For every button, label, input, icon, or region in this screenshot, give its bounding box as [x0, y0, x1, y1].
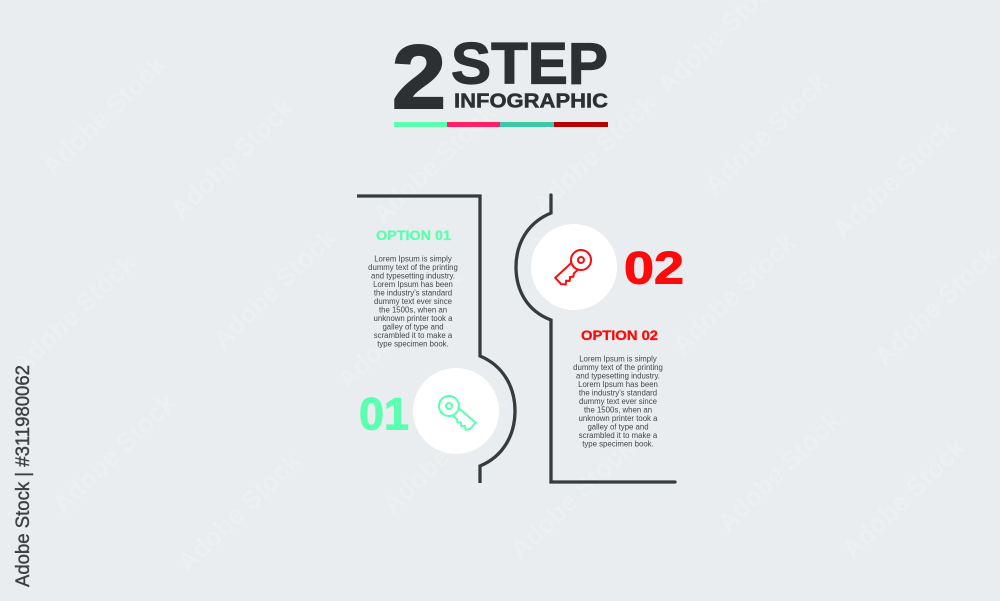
text: Adobe Stock	[46, 387, 182, 520]
text: Adobe Stock	[206, 222, 342, 355]
text block: option 01: and typesetting industry.	[371, 272, 455, 280]
text block: option 02: dummy text of the printing	[573, 363, 663, 372]
text block: option 01: the 1500s, when an	[379, 306, 447, 314]
outline: option 02 frame	[516, 195, 675, 482]
text block: option 01: unknown printer took a	[374, 314, 453, 323]
icon circle 02	[531, 224, 617, 310]
stock credit: Adobe Stock | #311980062	[12, 365, 34, 587]
icon circle 01	[413, 368, 499, 454]
text: Adobe Stock	[666, 227, 802, 360]
text block: option 02: Lorem Ipsum is simply	[579, 354, 657, 364]
title numeral 2: 2	[392, 28, 446, 128]
heading: option 02: OPTION 02	[581, 328, 658, 343]
number 01: 01	[359, 388, 409, 440]
text block: option 02: type specimen book.	[582, 440, 654, 448]
text block: option 01: scrambled it to make a	[374, 331, 453, 340]
text block: option 02: and typesetting industry.	[576, 372, 660, 380]
title word INFOGRAPHIC: INFOGRAPHIC	[454, 90, 608, 112]
text: Adobe Stock	[711, 405, 847, 538]
text: Adobe Stock	[868, 239, 1000, 372]
text block: option 01: dummy text of the printing	[368, 263, 458, 272]
text block: option 02: Lorem Ipsum has been	[578, 380, 658, 389]
text: Adobe Stock	[164, 92, 300, 225]
text: Adobe Stock	[526, 87, 662, 220]
text block: option 02: the 1500s, when an	[584, 406, 652, 414]
text block: option 01: galley of type and	[382, 322, 444, 332]
icon: red key	[552, 246, 595, 288]
text block: option 01: the industry's standard	[374, 288, 452, 298]
text: Adobe Stock	[376, 387, 512, 520]
heading: option 01: OPTION 01	[376, 228, 452, 243]
text: Adobe Stock	[366, 97, 502, 230]
title word STEP: STEP	[451, 32, 608, 96]
text: Adobe Stock	[331, 262, 467, 395]
text block: option 01: type specimen book.	[377, 340, 449, 348]
panel: option 01	[359, 228, 499, 454]
text: Adobe Stock	[836, 432, 972, 565]
text: Adobe Stock	[36, 49, 172, 182]
number 02: 02	[624, 242, 684, 294]
text block: option 01: dummy text ever since	[374, 297, 452, 306]
text block: option 01: Lorem Ipsum is simply	[374, 254, 452, 264]
text block: option 02: scrambled it to make a	[579, 431, 658, 440]
text: Adobe Stock	[504, 432, 640, 565]
text block: option 02: galley of type and	[587, 422, 649, 432]
outline: option 01 frame	[357, 196, 515, 483]
text: Adobe Stock	[6, 247, 142, 380]
panel: option 02	[531, 224, 684, 448]
text block: option 02	[573, 354, 663, 448]
text: Adobe Stock	[826, 112, 962, 245]
title colour bar	[394, 122, 608, 127]
icon: green key	[435, 392, 479, 434]
title	[392, 28, 608, 128]
text: Adobe Stock	[698, 67, 834, 200]
text block: option 01	[368, 254, 458, 348]
text block: option 02: dummy text ever since	[579, 397, 657, 406]
text block: option 02: unknown printer took a	[579, 414, 658, 423]
text block: option 02: the industry's standard	[579, 388, 657, 398]
text: Adobe Stock	[171, 445, 307, 578]
text block: option 01: Lorem Ipsum has been	[373, 280, 453, 289]
